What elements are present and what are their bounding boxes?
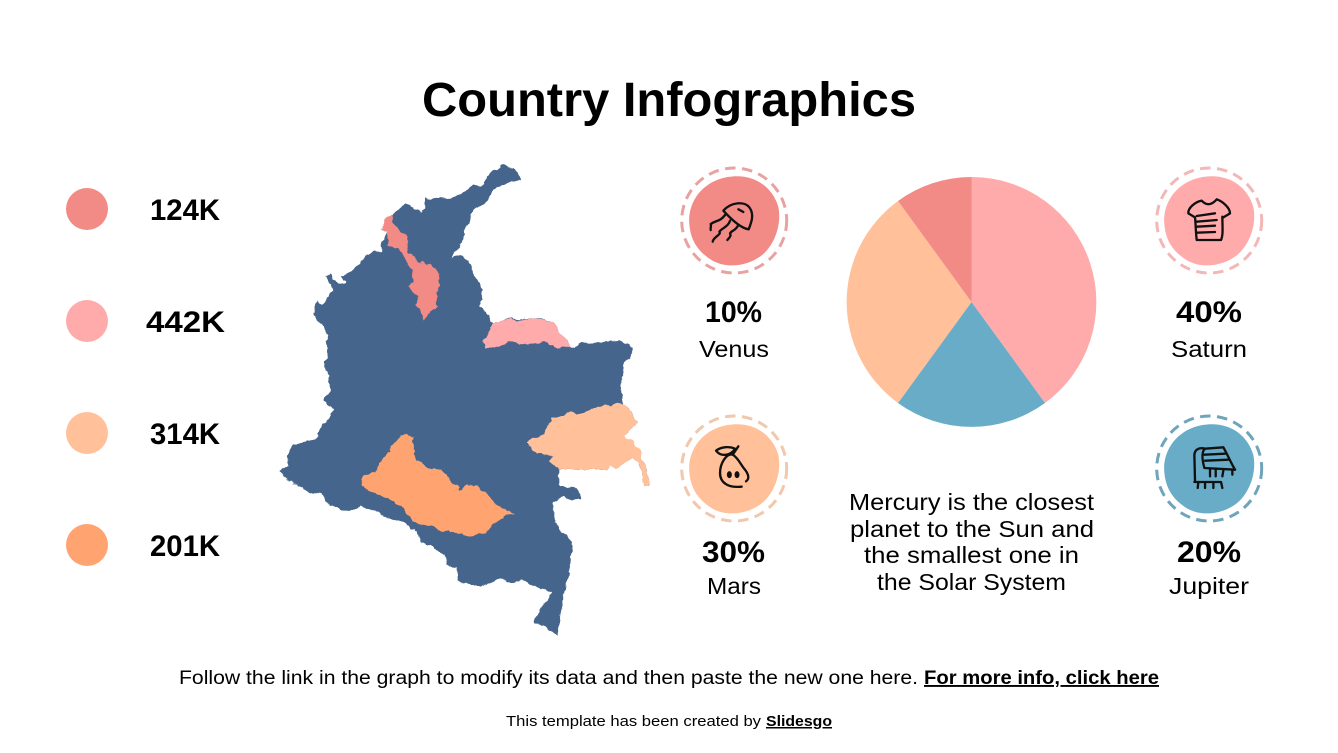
Jupiter label: 20%	[1177, 536, 1241, 569]
legend item: 314K: 314K	[150, 418, 220, 451]
icon: Saturn shirt badge	[1157, 168, 1262, 273]
title: Country Infographics	[422, 74, 916, 127]
description text: the Solar System	[877, 569, 1066, 595]
Mars label: 30%	[702, 536, 765, 569]
legend item: 124K	[66, 188, 220, 230]
icon: Jupiter scarf badge	[1157, 416, 1262, 521]
slice: Mars 30%	[847, 201, 972, 403]
legend item: 442K	[66, 300, 225, 342]
legend item: 201K	[66, 524, 220, 566]
slice: Saturn 40%	[972, 177, 1096, 403]
pie chart	[847, 177, 1096, 427]
description text	[849, 489, 1095, 595]
Mars label	[702, 536, 765, 599]
footer note	[179, 668, 1159, 689]
legend item: 314K	[66, 412, 220, 454]
Mars label: Mars	[707, 573, 761, 599]
Jupiter label: Jupiter	[1169, 573, 1249, 599]
Saturn label: Saturn	[1171, 336, 1247, 362]
region: orange	[361, 434, 513, 535]
Venus label: Venus	[699, 336, 769, 362]
legend	[66, 188, 225, 566]
description text: the smallest one in	[864, 542, 1079, 568]
legend item: 124K: 124K	[150, 194, 220, 227]
slice: Venus 10%	[898, 177, 972, 302]
map base	[278, 165, 651, 636]
region: peach	[526, 403, 651, 485]
icon: Mars pear badge	[682, 416, 787, 521]
icon: Venus jellyfish badge	[682, 168, 787, 273]
Venus label: 10%	[705, 296, 762, 329]
Venus label	[699, 296, 769, 362]
footer note: Follow the link in the graph to modify its data and then paste the new one here.	[179, 668, 918, 689]
legend item: 442K: 442K	[146, 306, 225, 339]
legend item: 201K: 201K	[150, 530, 220, 563]
Jupiter label	[1169, 536, 1249, 599]
map of Colombia	[278, 165, 651, 636]
credit line: This template has been created by	[506, 713, 762, 730]
Saturn label: 40%	[1176, 296, 1242, 329]
region: pink	[483, 318, 572, 349]
footer note: For more info, click here	[924, 668, 1159, 689]
region: red	[380, 213, 440, 320]
Saturn label	[1171, 296, 1247, 362]
credit line: Slidesgo	[766, 713, 832, 730]
description text: Mercury is the closest	[849, 489, 1095, 515]
slice: Jupiter 20%	[898, 302, 1045, 427]
description text: planet to the Sun and	[850, 516, 1094, 542]
